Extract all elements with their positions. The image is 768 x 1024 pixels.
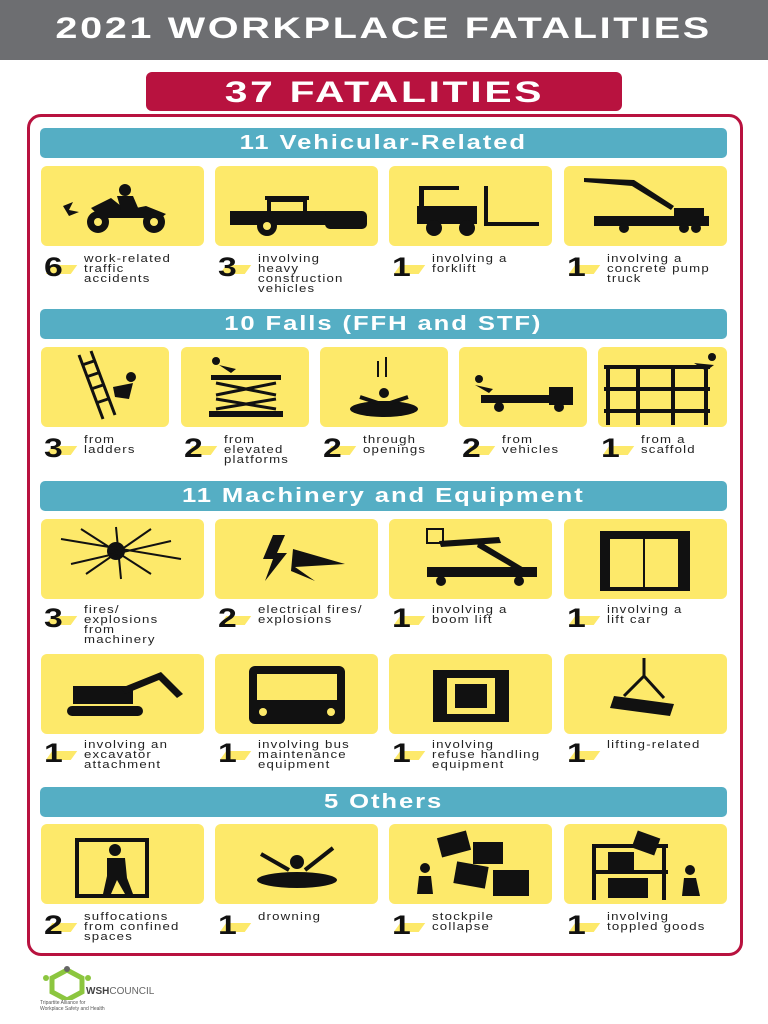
- card: forklift: [389, 166, 552, 246]
- text: 1: [567, 603, 586, 633]
- text: construction: [258, 273, 344, 285]
- text: 1: [392, 910, 411, 940]
- text: from a: [641, 434, 686, 446]
- card: toppled goods: [564, 824, 727, 904]
- card: refuse: [389, 654, 552, 734]
- text: openings: [363, 444, 426, 456]
- labels row 2: [44, 433, 136, 463]
- text: involving a: [432, 604, 508, 616]
- labels row 5: [44, 910, 180, 943]
- header: 2021 WORKPLACE FATALITIES: [56, 12, 712, 45]
- labels row 4: excavator: [84, 749, 152, 761]
- text: from: [224, 434, 255, 446]
- text: truck: [607, 273, 642, 285]
- text: electrical fires/: [258, 604, 363, 616]
- text: 2: [323, 433, 342, 463]
- labels row 4: [44, 738, 168, 771]
- text: maintenance: [258, 749, 347, 761]
- section bar: others: [40, 787, 727, 817]
- logo: WSH Council: WSHCOUNCIL: [86, 986, 154, 997]
- labels row 5: from confined: [84, 921, 180, 933]
- text: boom lift: [432, 614, 493, 626]
- text: equipment: [432, 759, 504, 771]
- card: bus: [215, 654, 378, 734]
- text: 2: [462, 433, 481, 463]
- card: lift car: [564, 519, 727, 599]
- card: stockpile: [389, 824, 552, 904]
- card: scaffold: [598, 347, 727, 427]
- text: involving: [258, 253, 320, 265]
- text: scaffold: [641, 444, 696, 456]
- section bar: others: 5 Others: [324, 791, 443, 813]
- labels row 4: 1: [44, 738, 63, 768]
- text: 1: [392, 738, 411, 768]
- text: involving: [607, 911, 669, 923]
- text: lift car: [607, 614, 652, 626]
- card: roller: [215, 166, 378, 246]
- text: from: [502, 434, 533, 446]
- text: 1: [218, 738, 237, 768]
- card: electrical: [215, 519, 378, 599]
- text: lifting-related: [607, 739, 701, 751]
- card: drowning: [215, 824, 378, 904]
- labels row 3: from: [84, 624, 115, 636]
- text: stockpile: [432, 911, 494, 923]
- section bar: machinery: 11 Machinery and Equipment: [182, 485, 585, 507]
- section bar: machinery: [40, 481, 727, 511]
- labels row 2: ladders: [84, 444, 136, 456]
- card: boom lift: [389, 519, 552, 599]
- total pill: [146, 72, 622, 111]
- text: equipment: [258, 759, 330, 771]
- card: vehicle fall: [459, 347, 587, 427]
- labels row 1: work-related: [84, 253, 171, 265]
- labels row 5: suffocations: [84, 911, 169, 923]
- text: forklift: [432, 263, 477, 275]
- labels row 1: [44, 252, 171, 285]
- card: ladder: [41, 347, 169, 427]
- text: drowning: [258, 911, 321, 923]
- text: heavy: [258, 263, 299, 275]
- text: involving a: [432, 253, 508, 265]
- labels row 4: involving an: [84, 739, 168, 751]
- section bar: vehicular: [40, 128, 727, 158]
- text: 1: [218, 910, 237, 940]
- text: vehicles: [258, 283, 315, 295]
- text: 1: [392, 252, 411, 282]
- text: 2: [218, 603, 237, 633]
- card: elevated platform: [181, 347, 309, 427]
- card: confined space: [41, 824, 204, 904]
- text: refuse handling: [432, 749, 540, 761]
- card: opening: [320, 347, 448, 427]
- frame: [27, 114, 743, 956]
- section bar: falls: 10 Falls (FFH and STF): [224, 313, 543, 335]
- labels row 2: from: [84, 434, 115, 446]
- text: involving: [432, 739, 494, 751]
- labels row 5: spaces: [84, 931, 133, 943]
- labels row 3: [44, 603, 158, 646]
- labels row 3: machinery: [84, 634, 156, 646]
- labels row 3: fires/: [84, 604, 120, 616]
- card: explosion: [41, 519, 204, 599]
- section bar: falls: [40, 309, 727, 339]
- text: 1: [567, 252, 586, 282]
- card: motorcycle: [41, 166, 204, 246]
- text: involving a: [607, 604, 683, 616]
- section bar: vehicular: 11 Vehicular-Related: [240, 132, 527, 154]
- card: excavator: [41, 654, 204, 734]
- labels row 1: 6: [44, 252, 63, 282]
- text: involving a: [607, 253, 683, 265]
- header: [0, 0, 768, 60]
- text: elevated: [224, 444, 284, 456]
- text: collapse: [432, 921, 490, 933]
- labels row 1: accidents: [84, 273, 151, 285]
- text: concrete pump: [607, 263, 710, 275]
- text: 3: [218, 252, 237, 282]
- logo: WSH Council: [40, 966, 154, 1012]
- logo: WSH Council: Workplace Safety and Health: [40, 1006, 105, 1012]
- labels row 5: 2: [44, 910, 63, 940]
- text: 1: [392, 603, 411, 633]
- text: vehicles: [502, 444, 559, 456]
- text: through: [363, 434, 416, 446]
- text: 1: [567, 910, 586, 940]
- text: 1: [567, 738, 586, 768]
- labels row 4: attachment: [84, 759, 161, 771]
- logo: WSH Council: Tripartite Alliance for: [40, 1000, 85, 1006]
- text: involving bus: [258, 739, 350, 751]
- labels row 2: 3: [44, 433, 63, 463]
- text: 2: [184, 433, 203, 463]
- text: 1: [601, 433, 620, 463]
- labels row 3: 3: [44, 603, 63, 633]
- total pill: 37 FATALITIES: [224, 76, 544, 109]
- card: concrete pump: [564, 166, 727, 246]
- text: platforms: [224, 454, 289, 466]
- labels row 3: explosions: [84, 614, 158, 626]
- labels row 1: traffic: [84, 263, 124, 275]
- text: explosions: [258, 614, 332, 626]
- text: toppled goods: [607, 921, 706, 933]
- card: lifting: [564, 654, 727, 734]
